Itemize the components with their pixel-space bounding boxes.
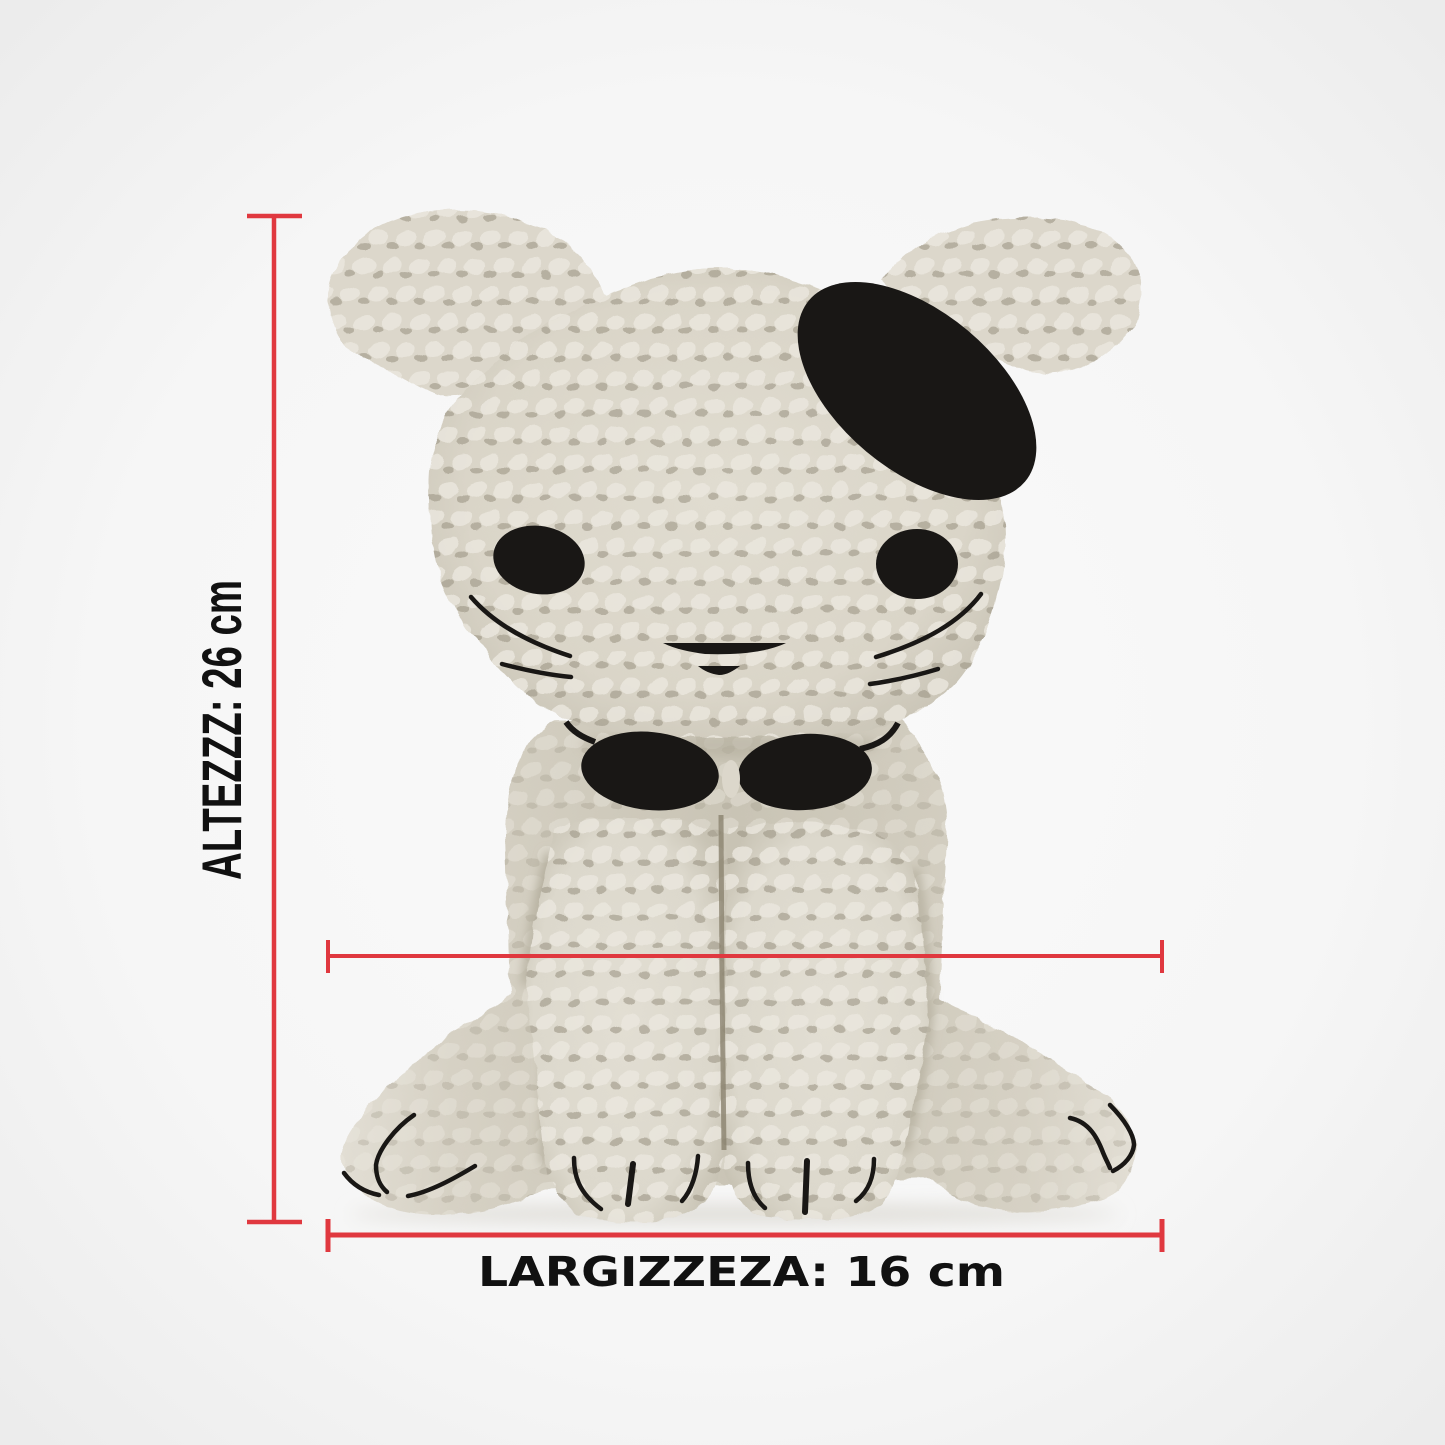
bow tie <box>566 722 898 817</box>
cat toy <box>328 210 1141 1223</box>
bottom width line <box>328 1219 1162 1252</box>
right eye <box>876 529 958 599</box>
leg divider <box>721 815 724 1150</box>
claws <box>344 1105 1134 1212</box>
left ear <box>328 210 650 400</box>
ground shadow <box>350 1205 1120 1223</box>
height label: ALTEZZZ: 26 cm <box>190 580 253 880</box>
whiskers and mouth <box>471 594 981 684</box>
black eye patch <box>758 240 1076 542</box>
leg shadows <box>526 853 928 1164</box>
middle width line <box>328 940 1162 973</box>
neck shadow <box>580 733 880 757</box>
height dimension line <box>247 216 302 1222</box>
right ear <box>882 217 1141 374</box>
width label: LARGIZZEZA: 16 cm <box>478 1248 1005 1296</box>
right front leg <box>724 823 928 1219</box>
head <box>430 268 1005 737</box>
left front leg <box>526 818 722 1222</box>
left eye <box>488 519 590 601</box>
body and hind legs <box>341 720 1137 1215</box>
